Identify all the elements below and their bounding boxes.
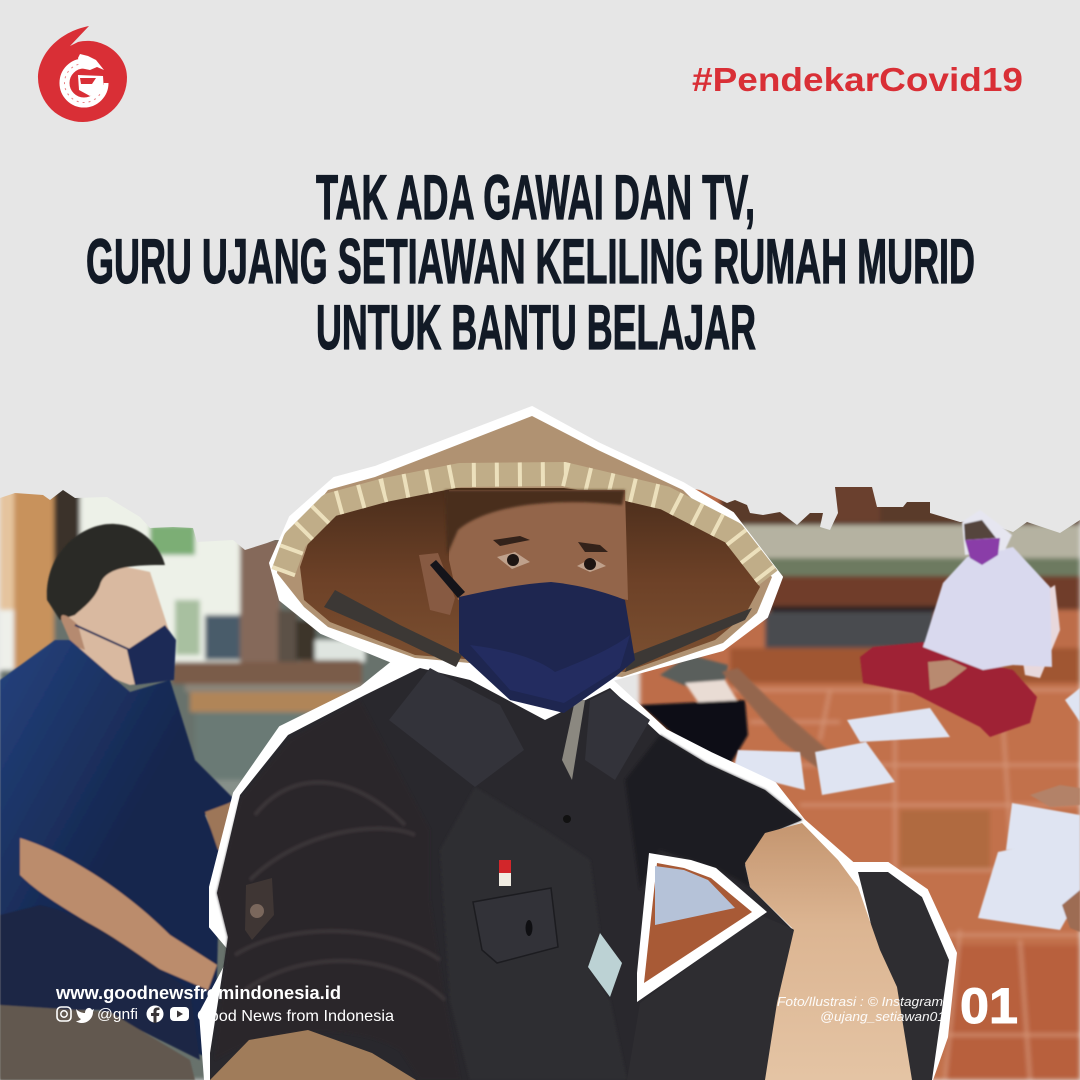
hat cone [277, 416, 772, 677]
icon: youtube [170, 1007, 189, 1021]
chin strap [324, 590, 752, 672]
main subject: teacher cutout [200, 407, 956, 1080]
white cutout outline [200, 407, 956, 1080]
inner undershirt glimpse [588, 933, 622, 997]
eyes [497, 552, 606, 572]
hashtag: #PendekarCovid19 [692, 61, 1023, 98]
forearm bottom left [210, 1030, 416, 1080]
hat rim band [283, 474, 768, 578]
shirt inner placket [562, 700, 585, 780]
photo credit: @ujang_setiawan01 [820, 1009, 945, 1024]
triangular gap with papers [637, 853, 767, 1002]
photo background: classroom visit scene [0, 480, 1080, 1080]
mask strap [430, 560, 465, 598]
hat underside [300, 488, 760, 672]
icon: instagram [57, 1007, 71, 1021]
background papers on the floor [733, 688, 1080, 932]
background right: tiled floor and bench [640, 480, 1080, 1080]
icon: twitter [76, 1008, 94, 1023]
photo credit [777, 994, 945, 1024]
placket button [563, 815, 571, 823]
page name: Good News from Indonesia [197, 1008, 394, 1025]
photo credit: Foto/Ilustrasi : © Instagram [777, 994, 943, 1009]
icon: facebook [146, 1006, 164, 1023]
face mask [459, 582, 635, 713]
background figure: student writing on floor [640, 655, 830, 770]
background left: room with window [0, 480, 400, 1080]
ear [419, 553, 455, 615]
arm and hand [745, 823, 912, 1080]
page number: 01 [960, 978, 1018, 1034]
shirt dark right sleeve [625, 735, 802, 890]
torn paper edge [0, 0, 1080, 550]
left sleeve shading [215, 700, 460, 1080]
shirt collar [389, 668, 650, 787]
eyebrows [493, 536, 608, 552]
mask lower fold [470, 635, 630, 703]
title line 1: TAK ADA GAWAI DAN TV, [316, 163, 755, 233]
twitter handle: @gnfi [97, 1006, 138, 1023]
footer: website and social handles [55, 982, 394, 1025]
logo: GNFI red swirl [38, 26, 127, 122]
title [86, 163, 975, 363]
background figure: man in navy shirt [0, 524, 235, 1080]
pants [627, 872, 949, 1080]
background figure: woman in white hijab [860, 510, 1060, 737]
title line 3: UNTUK BANTU BELAJAR [316, 293, 756, 363]
website url: www.goodnewsfromindonesia.id [55, 982, 341, 1003]
shirt chest panel [440, 787, 627, 1080]
sleeve button tab [245, 878, 274, 940]
pocket [473, 888, 558, 963]
brow shadow above face [445, 490, 625, 555]
shirt [210, 668, 802, 1080]
red white badge [499, 860, 511, 886]
pocket button [526, 920, 532, 936]
face [449, 490, 628, 600]
